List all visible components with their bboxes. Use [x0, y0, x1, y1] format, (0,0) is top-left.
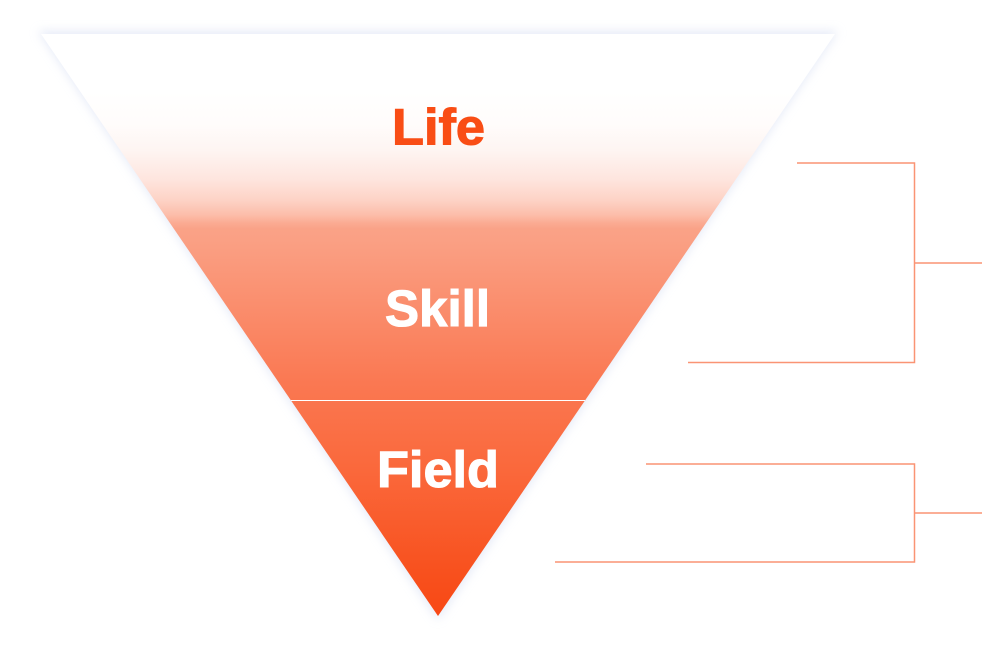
bracket: lower — [555, 464, 982, 562]
label: Life: Life — [392, 98, 485, 156]
label: Skill: Skill — [385, 280, 490, 337]
divider between skill and field — [291, 400, 585, 402]
inverted triangle funnel — [41, 34, 835, 616]
label: Field: Field — [377, 441, 499, 498]
triangle soft shadow — [38, 31, 838, 620]
bracket: upper — [688, 163, 982, 362]
